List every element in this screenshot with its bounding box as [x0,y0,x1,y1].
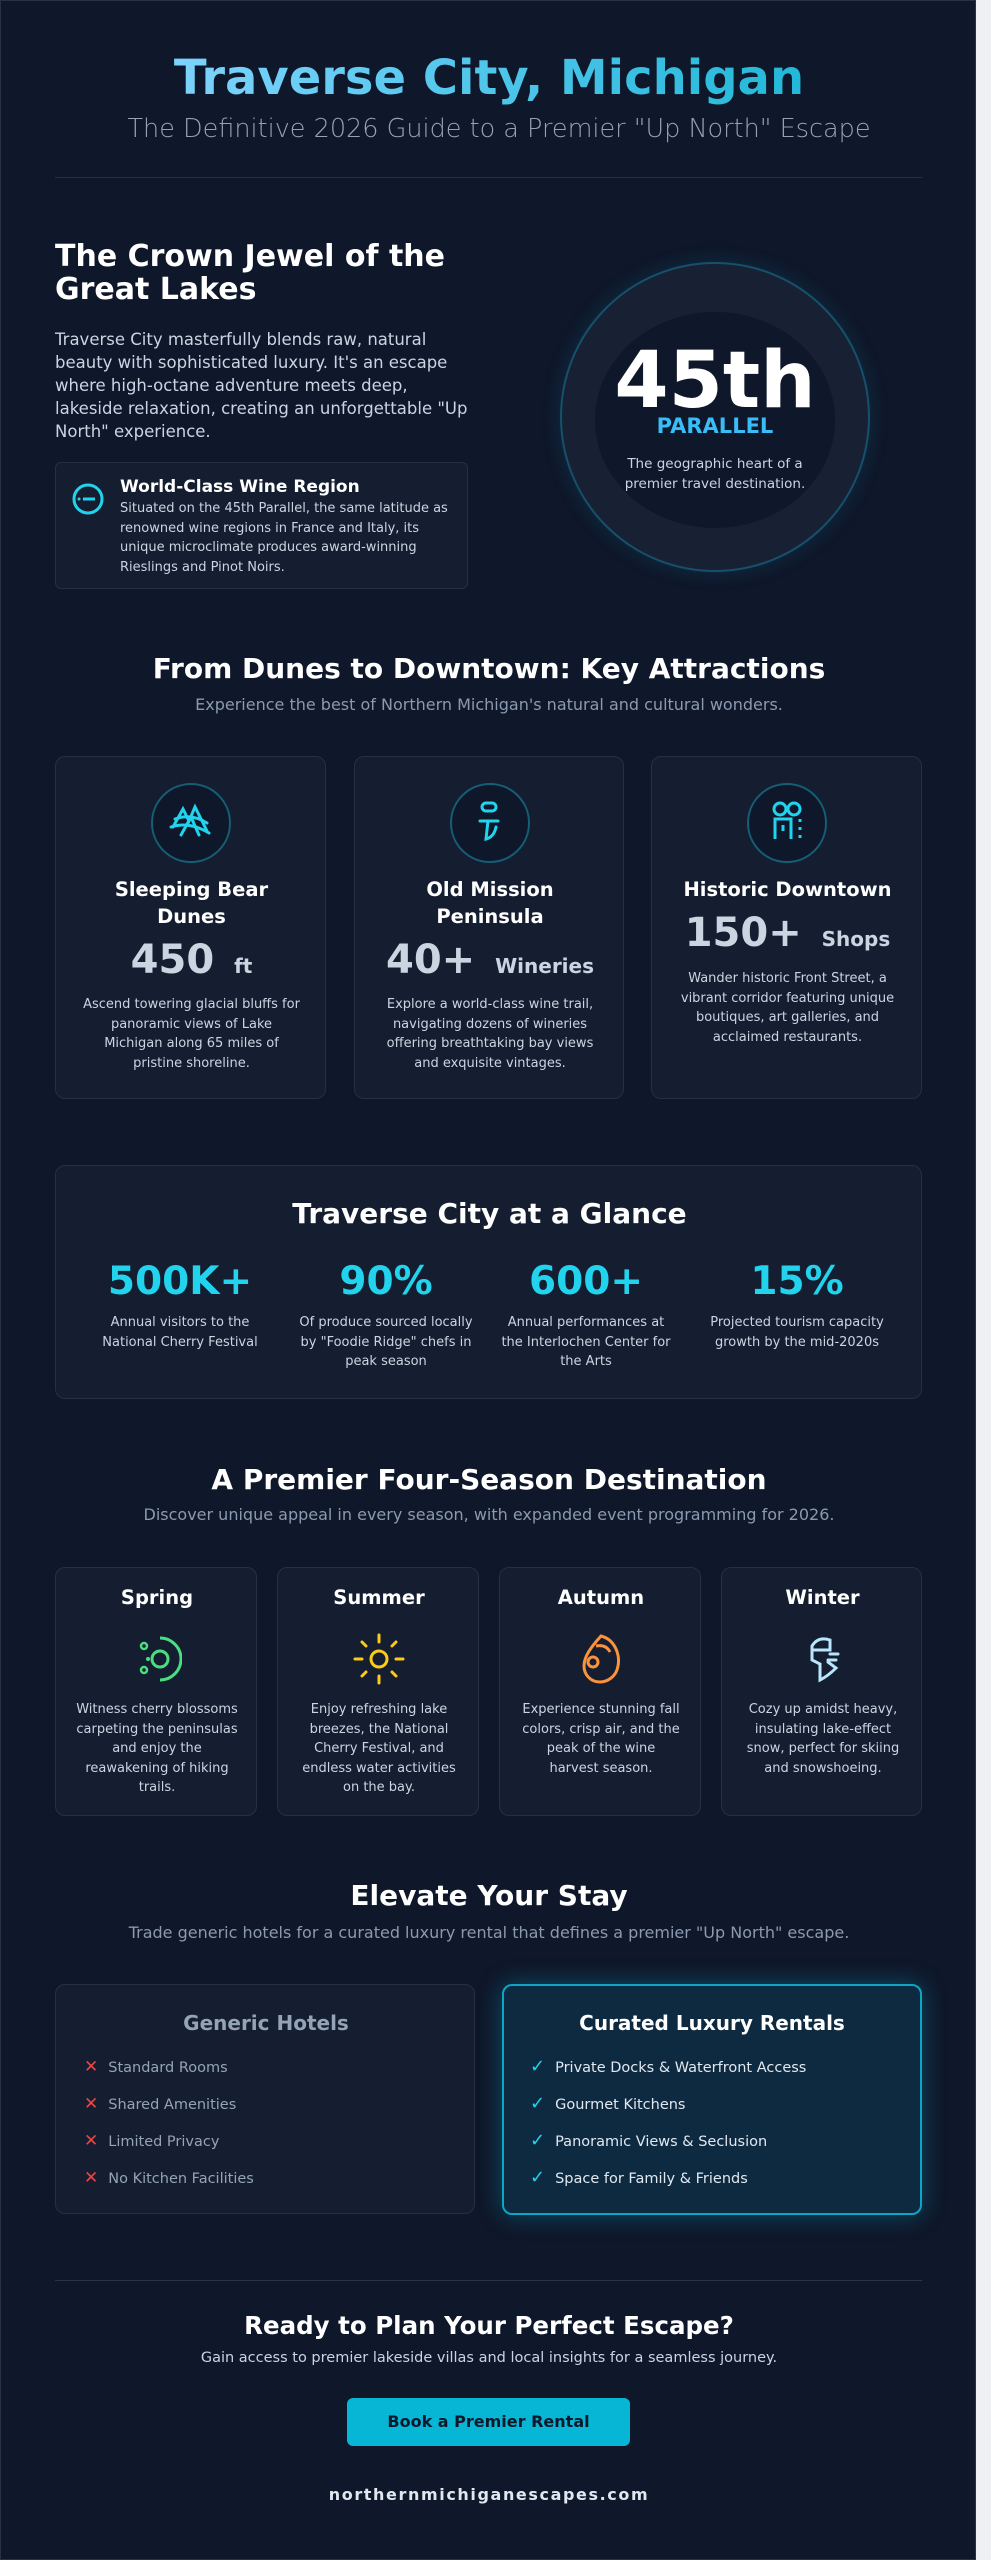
panel: autumn [499,1567,701,1816]
panel: historic downtown [651,756,922,1099]
stat: 450 ft [131,937,252,983]
panel: generic hotels [55,1984,475,2214]
button [347,2398,630,2446]
icon: dunes [151,783,231,863]
stat: growth: Projected tourism capacity growth by the mid-2020s [710,1315,884,1350]
list: cons: ✕ No Kitchen Facilities [84,2168,254,2188]
list: pros: ✓ Private Docks & Waterfront Access [530,2056,806,2077]
text: Michigan along 65 miles of pristine shoreline. [104,1036,279,1070]
text: Explore a world-class wine trail, navigating dozens of wineries offering breathtaking bay views and exquisite vintages. [387,997,593,1070]
heading: crown jewel: The Crown Jewel of the Great Lakes [55,239,445,307]
stat: 40+ Wineries [386,937,594,983]
panel: wine region [55,462,468,589]
panel: luxury rentals: Curated Luxury Rentals [579,2011,845,2035]
icon: winter [810,1637,840,1682]
big stat: 45th [614,336,816,426]
heading: Traverse City at a Glance [292,1197,687,1230]
title [426,878,554,928]
wine text: Situated on the 45th Parallel, the same latitude as renowned wine regions in France and Italy, its unique microclimate produces award-winning Rieslings and Pinot Noirs. [120,501,448,574]
footer url: northernmichiganescapes.com [329,2485,649,2504]
panel: old mission [354,756,624,1099]
stat: produce: Of produce sourced locally by "Foodie Ridge" chefs in peak season [299,1315,473,1369]
subheading: elevate: Trade generic hotels for a curated luxury rental that defines a premier "Up North" escape. [129,1923,849,1942]
panel: spring: Spring [121,1586,193,1609]
list: pros [530,2056,806,2188]
list: cons: ✕ Limited Privacy [84,2131,219,2151]
icon: spring [140,1636,182,1682]
panel: spring: Witness cherry blossoms carpeting the peninsulas and enjoy the reawakening of hiking trails. [76,1702,238,1795]
icon: leaf [582,1634,620,1684]
list: pros: ✓ Space for Family & Friends [530,2167,748,2188]
heading: seasons: A Premier Four-Season Destination [211,1463,767,1496]
heading: elevate: Elevate Your Stay [350,1879,628,1912]
button: Book a Premier Rental [387,2412,590,2431]
text [83,997,300,1070]
list: pros: ✓ Gourmet Kitchens [530,2093,686,2114]
text: Wander historic Front Street, a vibrant corridor featuring unique boutiques, art galleries, and acclaimed restaurants. [681,971,894,1044]
stat: growth [710,1259,884,1350]
title: Traverse City, Michigan [174,50,804,106]
icon: wine [72,484,104,514]
panel: luxury rentals [502,1984,922,2215]
subtitle: The Definitive 2026 Guide to a Premier "Up North" Escape [127,114,871,144]
title: Old Mission [426,878,554,901]
list: cons: ✕ Shared Amenities [84,2094,236,2114]
list: cons [84,2057,254,2188]
icon: sun [354,1634,404,1684]
stat: produce [299,1259,473,1369]
cta text: Gain access to premier lakeside villas and local insights for a seamless journey. [201,2350,777,2366]
intro paragraph: Traverse City masterfully blends raw, natural beauty with sophisticated luxury. It's an escape where high-octane adventure meets deep, lakeside relaxation, creating an unforgettable "Up North" experience. [55,330,467,441]
list: cons: ✕ Standard Rooms [84,2057,228,2077]
subheading: attractions: Experience the best of Northern Michigan's natural and cultural wonders. [195,695,783,714]
panel: winter [721,1567,922,1816]
stat: produce: 90% [339,1259,433,1304]
subheading: seasons: Discover unique appeal in every season, with expanded event programming for 2026. [144,1505,834,1524]
list: pros: ✓ Panoramic Views & Seclusion [530,2130,767,2151]
panel: spring [55,1567,257,1816]
panel: generic hotels: Generic Hotels [183,2011,349,2035]
stat: visitors: Annual visitors to the National Cherry Festival [102,1315,258,1350]
text: Ascend towering glacial bluffs for panoramic views of Lake [83,997,300,1032]
parallel label: PARALLEL [657,414,773,438]
circle: 45th parallel [560,262,870,572]
stat: visitors [102,1259,258,1350]
caption: The geographic heart of a premier travel destination. [625,456,805,492]
stat: performances: 600+ [529,1259,643,1304]
title: Dunes [157,905,226,928]
icon: wine glass [450,783,530,863]
title [115,878,268,928]
panel: autumn: Autumn [558,1586,644,1609]
panel: winter: Winter [785,1586,860,1609]
stat: visitors: 500K+ [108,1259,252,1304]
stat: 150+ Shops [685,910,890,956]
stat: growth: 15% [750,1259,844,1304]
title: Peninsula [436,905,544,928]
panel: at a glance [55,1165,922,1399]
panel: summer: Enjoy refreshing lake breezes, the National Cherry Festival, and endless water activities on the bay. [302,1702,456,1795]
panel: winter: Cozy up amidst heavy, insulating lake-effect snow, perfect for skiing and snowshoeing. [747,1702,899,1776]
panel: summer [277,1567,479,1816]
icon: shops [747,783,827,863]
stat: performances: Annual performances at the Interlochen Center for the Arts [501,1315,671,1369]
wine title: World-Class Wine Region [120,477,360,497]
panel: summer: Summer [333,1586,425,1609]
panel: sleeping bear dunes [55,756,326,1099]
heading: attractions: From Dunes to Downtown: Key Attractions [153,652,825,685]
title: Historic Downtown [683,878,892,901]
stat: performances [501,1259,671,1369]
heading: cta: Ready to Plan Your Perfect Escape? [244,2311,734,2340]
title: Sleeping Bear [115,878,268,901]
panel: autumn: harvest season. [549,1760,653,1776]
panel: autumn: Experience stunning fall colors, crisp air, and the peak of the wine [522,1702,680,1756]
